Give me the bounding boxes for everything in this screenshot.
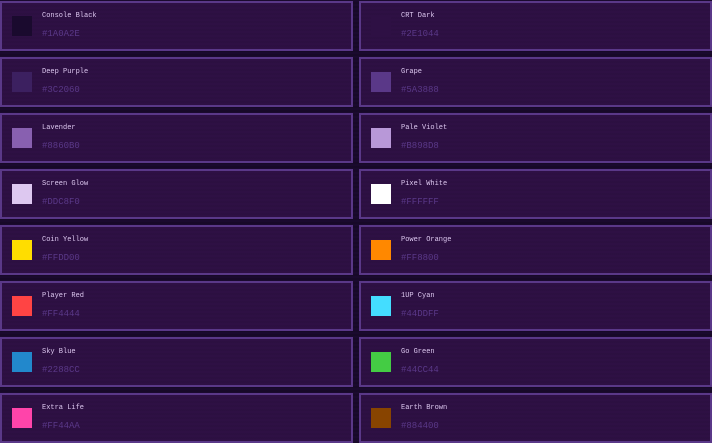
card: Grape: #5A3888 <box>401 85 439 95</box>
card: Earth Brown: Earth Brown <box>401 404 447 412</box>
card: Extra Life <box>0 393 353 443</box>
card: Lavender: Lavender <box>42 124 76 132</box>
card: Coin Yellow: Coin Yellow <box>42 236 88 244</box>
card: Coin Yellow: #FFDD00 <box>42 253 80 263</box>
card: Power Orange: #FF8800 <box>401 253 439 263</box>
card: Deep Purple: Deep Purple <box>42 68 88 76</box>
card: Pale Violet: Pale Violet <box>401 124 447 132</box>
card: Sky Blue: Sky Blue <box>42 348 76 356</box>
card: Screen Glow: Screen Glow <box>42 180 88 188</box>
card: 1UP Cyan: 1UP Cyan <box>401 292 435 300</box>
card: Extra Life: #FF44AA <box>42 421 80 431</box>
card: Console Black: #1A0A2E <box>42 29 80 39</box>
card: Earth Brown: #884400 <box>401 421 439 431</box>
card: Go Green <box>359 337 712 387</box>
card: Lavender <box>0 113 353 163</box>
card: Pixel White <box>359 169 712 219</box>
card: Player Red <box>0 281 353 331</box>
card: Power Orange: Power Orange <box>401 236 451 244</box>
card: CRT Dark: CRT Dark <box>401 12 435 20</box>
card: Deep Purple <box>0 57 353 107</box>
card: Console Black: Console Black <box>42 12 97 20</box>
card: Extra Life: Extra Life <box>42 404 84 412</box>
card: 1UP Cyan: #44DDFF <box>401 309 439 319</box>
card: CRT Dark <box>359 1 712 51</box>
card: Lavender: #8860B0 <box>42 141 80 151</box>
card: 1UP Cyan <box>359 281 712 331</box>
card: Pale Violet: #B898D8 <box>401 141 439 151</box>
card: Pixel White: Pixel White <box>401 180 447 188</box>
card: Console Black <box>0 1 353 51</box>
card: Power Orange <box>359 225 712 275</box>
card: Sky Blue <box>0 337 353 387</box>
card: Earth Brown <box>359 393 712 443</box>
card: Deep Purple: #3C2060 <box>42 85 80 95</box>
card: Pixel White: #FFFFFF <box>401 197 439 207</box>
card: Pale Violet <box>359 113 712 163</box>
card: Sky Blue: #2288CC <box>42 365 80 375</box>
card: Coin Yellow <box>0 225 353 275</box>
card: Go Green: Go Green <box>401 348 435 356</box>
card: Go Green: #44CC44 <box>401 365 439 375</box>
card: CRT Dark: #2E1044 <box>401 29 439 39</box>
card: Grape: Grape <box>401 68 422 76</box>
card: Grape <box>359 57 712 107</box>
card: Screen Glow: #DDC8F0 <box>42 197 80 207</box>
card: Player Red: Player Red <box>42 292 84 300</box>
card: Screen Glow <box>0 169 353 219</box>
card: Player Red: #FF4444 <box>42 309 80 319</box>
